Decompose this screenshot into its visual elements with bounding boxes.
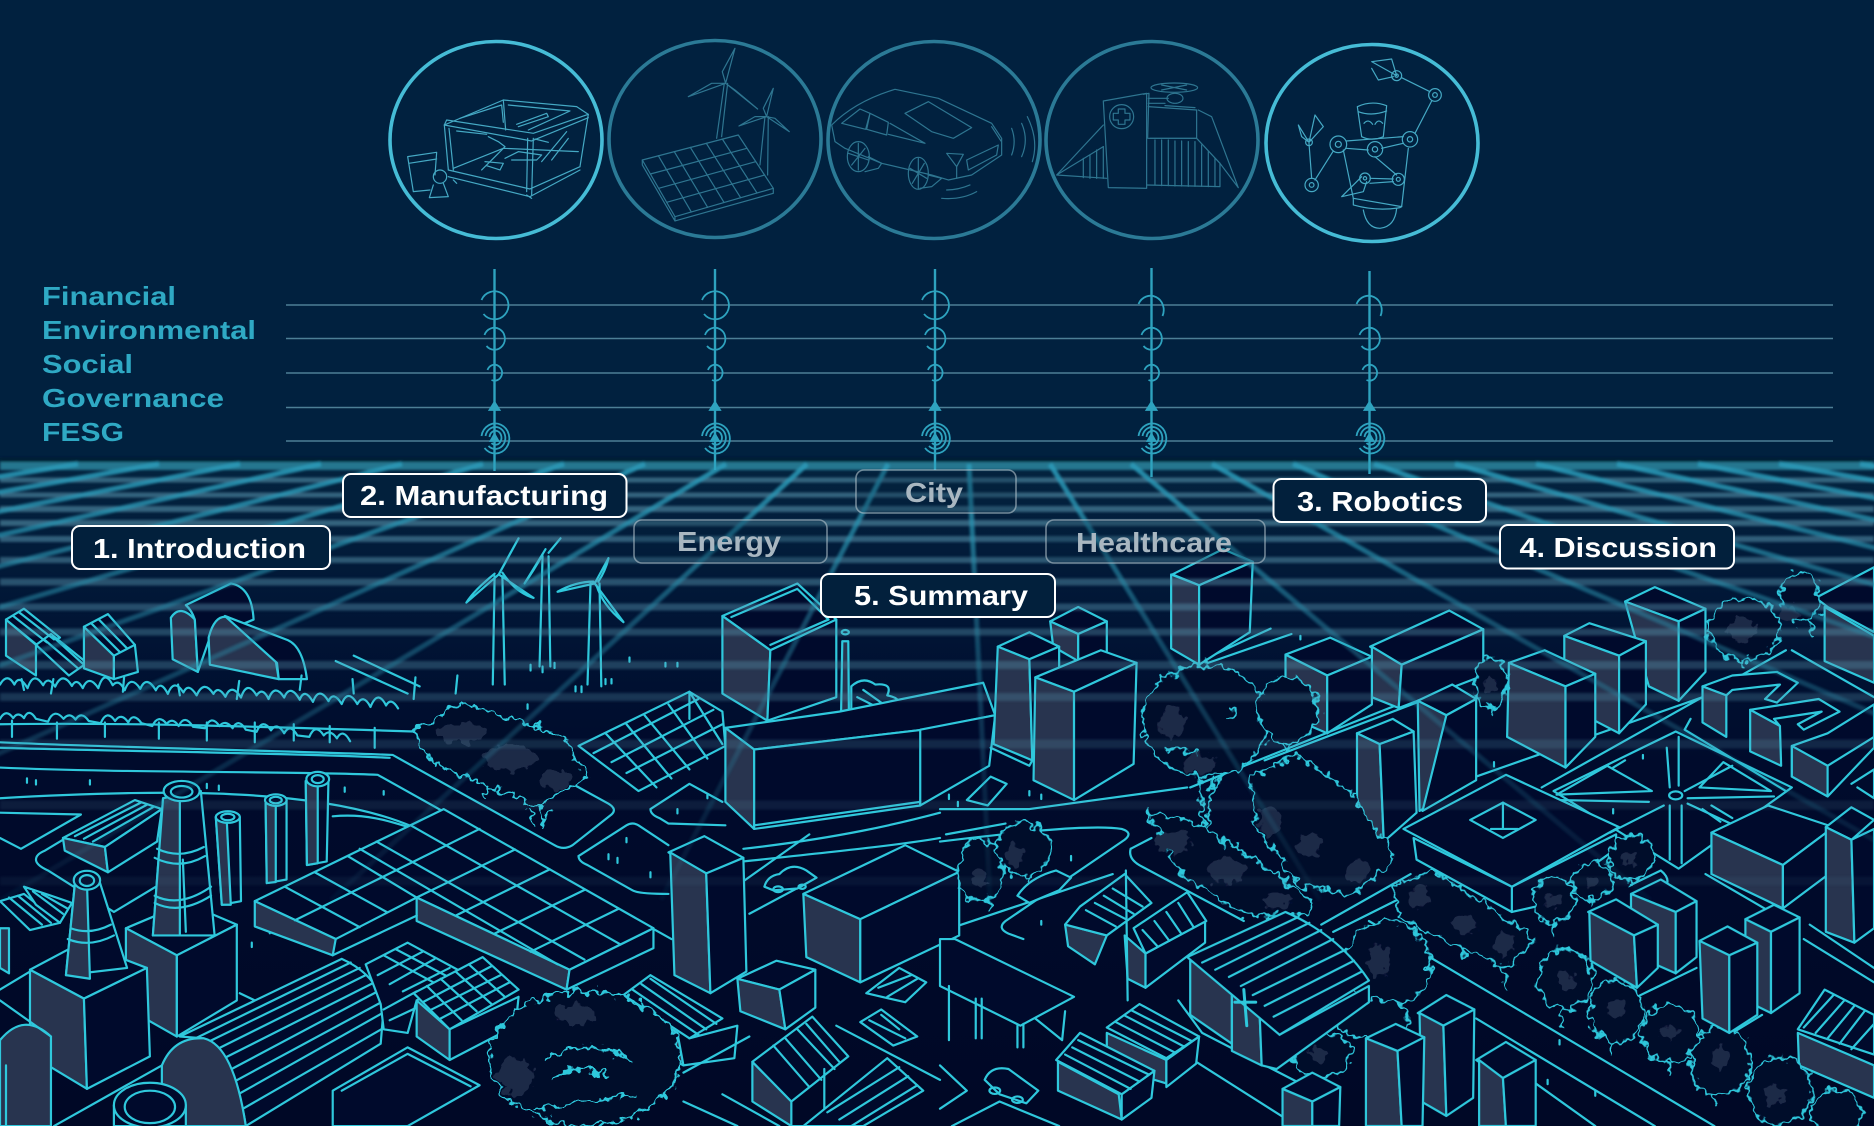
thin exhaust pipes — [216, 772, 329, 905]
avenue trees south-east — [1538, 949, 1862, 1126]
small cube — [737, 961, 815, 1029]
vertical column: healthcare — [1138, 268, 1166, 477]
diagonal hedge — [414, 703, 588, 825]
topic label: Healthcare — [1046, 520, 1265, 563]
boulevard hedge south of courtyard — [1393, 870, 1536, 990]
parking canopy — [940, 939, 1074, 1047]
hedge row along the north road — [0, 676, 457, 708]
far right hatched roof shed — [1798, 990, 1874, 1098]
church and southern towers — [1187, 879, 1800, 1126]
grass ticks on the lawns — [27, 657, 707, 947]
south towers — [1283, 995, 1536, 1126]
towers beside summary — [991, 607, 1137, 800]
plaza with radial paths — [1554, 731, 1792, 869]
workshop with solar grid roof — [366, 943, 519, 1060]
arched hangars — [171, 583, 307, 679]
tower beneath healthcare label — [1171, 549, 1253, 665]
small sawtooth roofs far left — [0, 887, 72, 973]
vertical column: manufacturing — [482, 269, 509, 471]
tower centre — [668, 836, 746, 993]
label: Environmental: Environmental — [42, 315, 256, 345]
icon circle: hospital with drone (healthcare) — [1046, 42, 1258, 238]
section label: 2. Manufacturing: 2. Manufacturing — [360, 480, 608, 511]
courtyard trees — [1532, 835, 1654, 935]
tall chimney stack and base — [126, 781, 237, 1037]
church — [1187, 912, 1369, 1069]
large square-top block bottom — [333, 1047, 480, 1126]
label: FESG: FESG — [42, 417, 124, 447]
background sky — [0, 0, 1874, 462]
midtown towers — [1286, 587, 1705, 842]
wind turbines — [466, 538, 623, 686]
section label: 2. Manufacturing — [343, 474, 626, 517]
downtown towers — [940, 549, 1874, 1120]
horizontal grid bands — [0, 460, 1874, 881]
section label: 4. Discussion: 4. Discussion — [1520, 532, 1717, 563]
central hedges — [1148, 755, 1396, 916]
topic label: City — [856, 470, 1016, 513]
ground plane — [0, 461, 1874, 1126]
ESG dimension labels — [42, 281, 256, 447]
rooftop greenery near tower — [851, 680, 898, 710]
label: Social: Social — [42, 349, 133, 379]
sawtooth sheds top left — [6, 609, 138, 679]
far right buildings — [1702, 567, 1874, 798]
factory district — [0, 583, 995, 1126]
roundabout garden — [489, 991, 680, 1125]
label: Financial: Financial — [42, 281, 176, 311]
houses lower centre — [623, 975, 923, 1126]
large avenue tree — [1143, 665, 1268, 827]
icon circle: robot (robotics) — [1266, 44, 1478, 242]
parked cars — [860, 968, 926, 1046]
topic label: Energy — [634, 520, 827, 563]
cottages — [1065, 870, 1206, 1000]
park trees by the road — [958, 657, 1508, 910]
vertical column: energy — [702, 269, 730, 470]
icon circle: 3D printer (manufacturing) — [390, 42, 602, 238]
cars south — [985, 870, 1071, 1103]
second tree — [1259, 677, 1318, 751]
section label: 5. Summary: 5. Summary — [854, 580, 1028, 611]
south-east tower cluster — [1588, 879, 1800, 1033]
vertical column: robotics — [1356, 271, 1384, 474]
converging grid lines — [0, 464, 1874, 900]
roads and blocks — [0, 629, 1874, 1126]
orchard row — [0, 713, 414, 748]
long city hall — [725, 683, 995, 829]
glass lattice roof — [579, 692, 725, 791]
second chimney stack — [30, 871, 150, 1089]
lower cottages — [1056, 1004, 1199, 1120]
vertical column: city — [922, 269, 950, 470]
topic label: Energy: Energy — [677, 526, 781, 557]
large slab block — [803, 845, 959, 982]
topic label: City: City — [905, 477, 963, 508]
top cube under summary label — [722, 583, 849, 721]
courtyard building — [1403, 775, 1619, 912]
car near tower — [967, 777, 1007, 805]
section label: 4. Discussion — [1500, 525, 1734, 568]
section label: 5. Summary — [821, 574, 1055, 617]
round silo — [114, 1083, 186, 1126]
label: Governance: Governance — [42, 383, 224, 413]
section label: 3. Robotics: 3. Robotics — [1297, 486, 1463, 517]
section label: 1. Introduction: 1. Introduction — [93, 533, 306, 564]
topic label: Healthcare: Healthcare — [1076, 527, 1232, 558]
east slab and tower — [1711, 805, 1874, 943]
horizontal dimension lines — [286, 305, 1833, 441]
quonset hall — [162, 959, 384, 1126]
section label: 1. Introduction — [72, 526, 330, 569]
arch far bottom left — [0, 1000, 51, 1126]
trees and hedges — [414, 573, 1862, 1126]
north-east trees — [1708, 573, 1820, 668]
section label: 3. Robotics — [1274, 479, 1486, 522]
church garden — [1291, 922, 1430, 1078]
perspective grid overlay — [0, 460, 1874, 900]
icon circle: wind and solar (energy) — [609, 40, 821, 238]
car on road — [764, 867, 817, 892]
long warehouse — [63, 800, 162, 872]
isometric city illustration — [0, 538, 1874, 1126]
icon circle: autonomous car (city) — [828, 42, 1040, 238]
stepped solar roof building — [255, 809, 653, 990]
